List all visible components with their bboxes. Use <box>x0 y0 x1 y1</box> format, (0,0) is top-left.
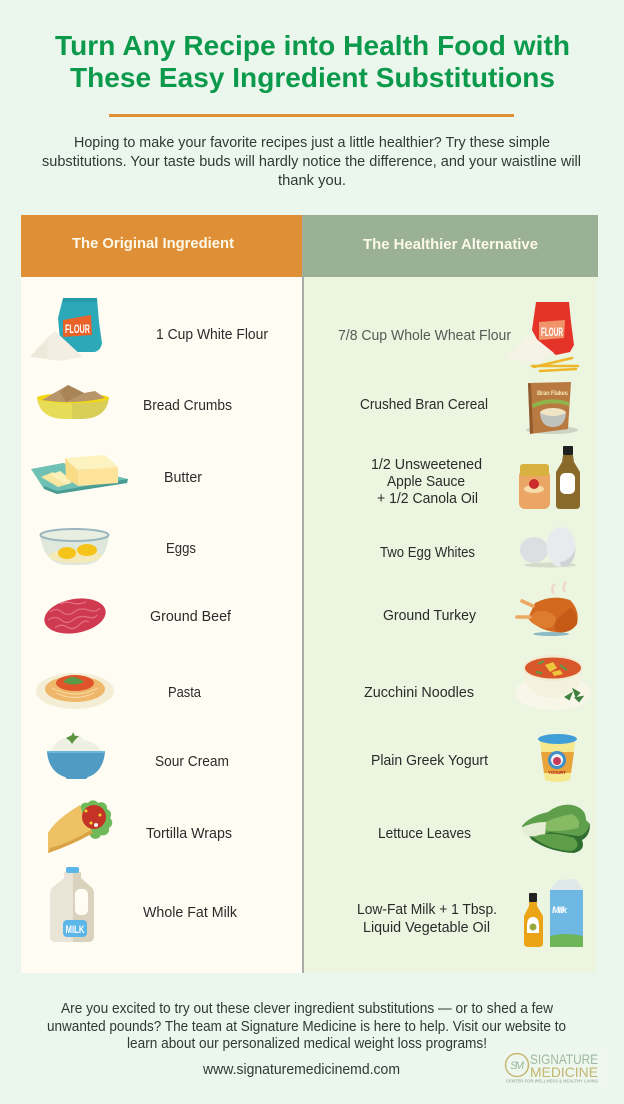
label: 1/2 Unsweetened <box>371 457 482 473</box>
title: Turn Any Recipe into Health Food with <box>55 30 570 61</box>
label: Lettuce Leaves <box>378 826 471 842</box>
label: + 1/2 Canola Oil <box>377 491 478 507</box>
panel: healthier alternatives <box>303 215 598 973</box>
footer text: learn about our personalized medical weight loss programs! <box>127 1036 487 1052</box>
right header <box>303 215 598 277</box>
footer text: Are you excited to try out these clever ingredient substitutions — or to shed a few <box>61 1001 553 1017</box>
icon: two eggs <box>520 527 576 568</box>
label: Bread Crumbs <box>143 398 232 414</box>
label <box>371 457 482 507</box>
right header: The Healthier Alternative <box>363 236 538 253</box>
label: Two Egg Whites <box>380 545 475 561</box>
label: Plain Greek Yogurt <box>371 753 488 769</box>
icon: sour cream bowl <box>47 732 105 779</box>
icon: yogurt cup <box>538 734 577 782</box>
icon: vegetable oil and milk carton <box>524 879 583 947</box>
label: Pasta <box>168 685 202 701</box>
icon: bran cereal box <box>526 382 578 434</box>
logo: Signature Medicine: SM <box>510 1060 525 1072</box>
label: Liquid Vegetable Oil <box>363 920 490 936</box>
intro text: substitutions. Your taste buds will hardly notice the difference, and your waistline will <box>42 154 581 170</box>
logo: Signature Medicine <box>503 1045 608 1092</box>
label: Low-Fat Milk + 1 Tbsp. <box>357 902 497 918</box>
label: Eggs <box>166 541 196 557</box>
icon: wheat flour bag <box>505 302 578 371</box>
left panel background <box>21 277 302 973</box>
icon: lettuce leaves <box>521 805 590 853</box>
left header: The Original Ingredient <box>72 235 234 252</box>
label: 1 Cup White Flour <box>156 327 268 343</box>
label: 7/8 Cup Whole Wheat Flour <box>338 328 511 344</box>
label: Ground Turkey <box>383 608 477 624</box>
icon: tortilla wrap <box>48 800 112 853</box>
intro text <box>42 135 581 189</box>
label <box>357 902 497 936</box>
intro text: thank you. <box>278 173 346 189</box>
icon: roast turkey <box>517 582 578 636</box>
footer text: unwanted pounds? The team at Signature Medicine is here to help. Visit our website to <box>47 1019 566 1035</box>
label: Whole Fat Milk <box>143 905 238 921</box>
label: Sour Cream <box>155 754 229 770</box>
icon: white flour bag <box>30 298 102 361</box>
website url: www.signaturemedicinemd.com <box>202 1062 400 1078</box>
icon: vegetable oil and milk carton: Milk <box>552 905 568 915</box>
icon: bran cereal box: Bran Flakes <box>537 391 569 397</box>
icon: yogurt cup: YOGURT <box>548 770 566 775</box>
logo: Signature Medicine: MEDICINE <box>530 1064 598 1080</box>
right panel background <box>304 277 597 973</box>
logo: Signature Medicine: SIGNATURE <box>530 1052 598 1067</box>
title <box>55 30 570 93</box>
label: Zucchini Noodles <box>364 685 474 701</box>
icon: milk jug <box>50 867 94 942</box>
logo: Signature Medicine: CENTER FOR WELLNESS & HEALTHY LIVING <box>506 1078 598 1084</box>
icon: bread crumbs bowl <box>37 385 109 419</box>
icon: apple sauce and canola oil <box>519 446 580 509</box>
label: Ground Beef <box>150 609 232 625</box>
label: Crushed Bran Cereal <box>360 397 488 413</box>
intro text: Hoping to make your favorite recipes just a little healthier? Try these simple <box>74 135 550 151</box>
label: Apple Sauce <box>387 474 465 490</box>
footer text <box>47 1001 566 1052</box>
label: Butter <box>164 470 202 486</box>
icon: pasta plate <box>36 673 114 709</box>
title: These Easy Ingredient Substitutions <box>70 62 555 93</box>
icon: egg bowl <box>40 529 109 565</box>
icon: vegetable soup <box>515 655 591 710</box>
icon: milk jug: MILK <box>66 924 85 936</box>
panel: original ingredients <box>21 215 302 973</box>
icon: butter on tray <box>31 455 128 494</box>
icon: ground beef <box>42 594 108 638</box>
left header <box>21 215 302 277</box>
icon: white flour bag: FLOUR <box>65 322 90 336</box>
icon: wheat flour bag: FLOUR <box>541 325 563 339</box>
label: Tortilla Wraps <box>146 826 232 842</box>
